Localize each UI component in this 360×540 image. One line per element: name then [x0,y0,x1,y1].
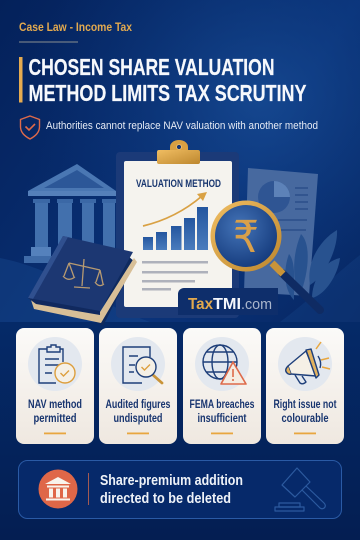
trend arrow [143,192,207,226]
banner text [100,472,243,507]
hero illustration [24,140,340,326]
divider [88,473,89,505]
card: Right issue not colourable: colourable [282,411,329,425]
icon: clipboard check [39,345,75,383]
chart heading: VALUATION METHOD [136,178,221,190]
icon: shield [20,116,40,139]
eyebrow underline [19,42,78,43]
icon: clip [157,140,200,164]
card: Right issue not colourable [266,328,344,444]
banner text: Share-premium addition [100,472,243,489]
subtitle with shield icon [20,116,318,139]
brand badge: .com [241,296,272,313]
clipboard [116,140,239,318]
conclusion banner [18,460,342,518]
icon: leaves [285,230,340,300]
brand badge: Tax [188,296,213,313]
icon: report sheet [244,168,318,296]
card: Audited figures undisputed [99,328,177,444]
icon: document magnifier [123,347,162,383]
banner text: directed to be deleted [100,490,231,507]
text lines [142,261,208,290]
card: Audited figures undisputed: undisputed [114,411,162,425]
card: FEMA breaches insufficient [183,328,261,444]
title [19,54,306,106]
card: Right issue not colourable: Right issue not [274,397,336,411]
icon: institution badge [38,470,78,508]
card: FEMA breaches insufficient: FEMA breaches [190,397,255,411]
icon: magnifier with rupee: ₹ [233,212,259,263]
bar chart [143,207,208,250]
icon: magnifier with rupee [210,200,320,310]
icon: megaphone [286,342,330,384]
icon: classical building [24,164,116,263]
icon: law book [28,236,137,326]
subtitle with shield icon: Authorities cannot replace NAV valuation with another method [46,120,318,132]
eyebrow label: Case Law - Income Tax [19,20,132,34]
title: CHOSEN SHARE VALUATION [28,54,274,80]
brand badge [178,288,278,315]
card: NAV method permitted [16,328,94,444]
card: NAV method permitted: NAV method [28,397,82,411]
icon: gavel [275,468,325,511]
icon: globe warning [203,345,246,384]
card: NAV method permitted: permitted [34,411,76,425]
card: FEMA breaches insufficient: insufficient [198,411,246,425]
brand badge: TMI [213,296,241,313]
card: Audited figures undisputed: Audited figures [106,397,171,411]
